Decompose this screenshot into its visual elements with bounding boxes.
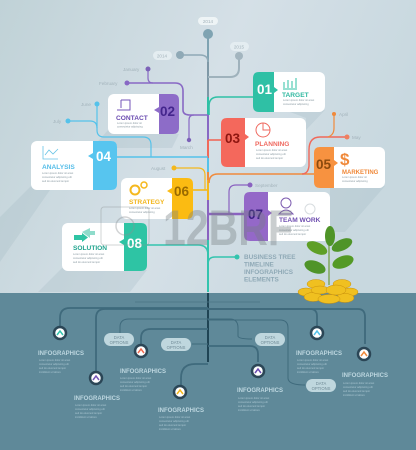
watermark: 12BRF [163, 200, 293, 256]
card 01 target: consectetur adipiscing [283, 102, 309, 106]
card 06 strategy: STRATEGY [129, 199, 165, 206]
infographics text blocks: INFOGRAPHICS [158, 408, 204, 414]
infographics text blocks: consectetur adipiscing elit [159, 419, 189, 423]
infographics text blocks: incididunt ut labore [39, 370, 61, 374]
card 05 marketing: 05 [316, 157, 332, 172]
card 04 analysis: 04 [96, 149, 112, 164]
infographics text blocks: INFOGRAPHICS [237, 388, 283, 394]
card 07 team work [244, 192, 330, 241]
card 04 analysis: ANALYSIS [42, 164, 75, 171]
card 02 contact: CONTACT [116, 115, 148, 122]
card 08 solution: consectetur adipiscing elit [73, 256, 103, 260]
year and month labels: May [352, 135, 361, 140]
heading: business tree: TIMELINE [244, 262, 275, 268]
card 01 target [253, 72, 325, 112]
data option labels: OPTIONS [261, 340, 280, 345]
data option labels: OPTIONS [110, 340, 129, 345]
year and month labels: 2015 [234, 44, 245, 50]
infographics text blocks: consectetur adipiscing elit [39, 362, 69, 366]
card 06 strategy [121, 178, 193, 219]
card 07 team work: sed do eiusmod tempor [279, 232, 306, 236]
card 01 target: 01 [257, 82, 273, 97]
long card shadows [0, 110, 385, 292]
year and month labels: January [123, 67, 140, 72]
background top [0, 0, 416, 293]
infographics text blocks: INFOGRAPHICS [296, 351, 342, 357]
card 03 planning: Lorem ipsum dolor sit amet [256, 148, 288, 152]
year and month labels: July [53, 119, 62, 124]
infographics text blocks: consectetur adipiscing elit [343, 385, 373, 389]
card 03 planning: 03 [225, 131, 241, 146]
card 01 target: Lorem ipsum dolor sit amet [283, 98, 315, 102]
data option labels: DATA [114, 335, 124, 340]
year and month labels: June [81, 102, 91, 107]
branch dots [66, 29, 350, 260]
tree trunk [207, 35, 209, 362]
card 05 marketing [314, 147, 385, 188]
infographics text blocks: sed do eiusmod tempor [159, 423, 186, 427]
infographics text blocks: incididunt ut labore [297, 370, 319, 374]
card 02 contact [108, 94, 179, 134]
infographics text blocks: Lorem ipsum dolor sit amet [343, 381, 375, 385]
infographics text blocks: INFOGRAPHICS [74, 396, 120, 402]
card 07 team work: 07 [248, 207, 263, 222]
card 03 planning: consectetur adipiscing elit [256, 152, 286, 156]
infographics text blocks: INFOGRAPHICS [120, 369, 166, 375]
nodes [54, 327, 370, 398]
icon: plant with coins [298, 226, 358, 304]
data option labels: DATA [265, 335, 275, 340]
infographics text blocks: Lorem ipsum dolor sit amet [238, 396, 270, 400]
background bottom [0, 293, 416, 450]
year and month labels: September [255, 183, 278, 188]
infographics text blocks: Lorem ipsum dolor sit amet [75, 403, 107, 407]
card 03 planning [221, 118, 306, 167]
card 06 strategy: Lorem ipsum dolor sit amet [129, 206, 161, 210]
card 03 planning: PLANNING [255, 141, 289, 148]
card 02 contact: 02 [160, 104, 175, 119]
heading: business tree: INFOGRAPHICS [244, 269, 294, 276]
heading: business tree: BUSINESS TREE [244, 254, 296, 261]
year and month labels: April [339, 112, 348, 117]
year and month labels: August [151, 166, 166, 171]
card 07 team work: Lorem ipsum dolor sit amet [279, 224, 311, 228]
card 05 marketing: $ [340, 150, 350, 169]
infographics text blocks: Lorem ipsum dolor sit amet [120, 376, 152, 380]
infographics text blocks: Lorem ipsum dolor sit amet [159, 415, 191, 419]
infographics text blocks: incididunt ut labore [120, 388, 142, 392]
infographics text blocks: incididunt ut labore [343, 393, 365, 397]
infographics text blocks: INFOGRAPHICS [38, 351, 84, 357]
card 01 target: TARGET [282, 92, 309, 99]
card 04 analysis: Lorem ipsum dolor sit amet [42, 171, 74, 175]
year and month labels: February [99, 81, 118, 86]
infographics text blocks: INFOGRAPHICS [342, 373, 388, 379]
card 06 strategy: consectetur adipiscing [129, 210, 155, 214]
year and month labels: March [180, 145, 193, 150]
infographics text blocks: incididunt ut labore [75, 415, 97, 419]
infographics text blocks: incididunt ut labore [159, 427, 181, 431]
card 07 team work: TEAM WORK [279, 217, 321, 224]
card 08 solution: SOLUTION [73, 245, 107, 252]
card 03 planning: sed do eiusmod tempor [256, 156, 283, 160]
infographics text blocks: consectetur adipiscing elit [75, 407, 105, 411]
year and month labels: 2014 [157, 54, 168, 58]
data option labels: DATA [316, 381, 326, 386]
infographics text blocks: Lorem ipsum dolor sit amet [39, 358, 71, 362]
card 08 solution: Lorem ipsum dolor sit amet [73, 252, 105, 256]
heading: business tree [244, 254, 296, 284]
infographics text blocks: sed do eiusmod tempor [343, 389, 370, 393]
card 08 solution: 08 [127, 236, 143, 251]
infographics text blocks [38, 351, 388, 431]
card 05 marketing: consectetur adipiscing [342, 179, 368, 183]
infographics text blocks: consectetur adipiscing elit [120, 380, 150, 384]
card 04 analysis: consectetur adipiscing elit [42, 175, 72, 179]
watermark [101, 200, 293, 256]
card 07 team work: consectetur adipiscing elit [279, 228, 309, 232]
data option labels [104, 333, 336, 392]
data option labels: OPTIONS [312, 386, 331, 391]
card 05 marketing: MARKETING [342, 170, 379, 176]
year and month labels: 2014 [203, 19, 214, 24]
data option labels: DATA [171, 340, 181, 345]
infographics text blocks: sed do eiusmod tempor [39, 366, 66, 370]
infographics text blocks: sed do eiusmod tempor [297, 366, 324, 370]
card 02 contact: Lorem ipsum dolor sit [117, 121, 142, 125]
infographics text blocks: consectetur adipiscing elit [297, 362, 327, 366]
infographics text blocks: sed do eiusmod tempor [75, 411, 102, 415]
card 04 analysis: sed do eiusmod tempor [42, 179, 69, 183]
infographics text blocks: sed do eiusmod tempor [120, 384, 147, 388]
infographics text blocks: consectetur adipiscing elit [238, 400, 268, 404]
infographics text blocks: Lorem ipsum dolor sit amet [297, 358, 329, 362]
infographics text blocks: sed do eiusmod tempor [238, 404, 265, 408]
card 05 marketing: Lorem ipsum dolor sit [342, 175, 367, 179]
heading: business tree: ELEMENTS [244, 276, 280, 284]
card 08 solution [62, 223, 147, 271]
branches [68, 55, 347, 264]
data option labels: OPTIONS [167, 345, 186, 350]
infographics text blocks: incididunt ut labore [238, 408, 260, 412]
root lines [60, 302, 365, 385]
card 04 analysis [31, 141, 117, 190]
year and month labels [53, 17, 361, 188]
card 02 contact: consectetur adipiscing [117, 124, 143, 128]
card 08 solution: sed do eiusmod tempor [73, 260, 100, 264]
card 06 strategy: 06 [174, 184, 190, 199]
